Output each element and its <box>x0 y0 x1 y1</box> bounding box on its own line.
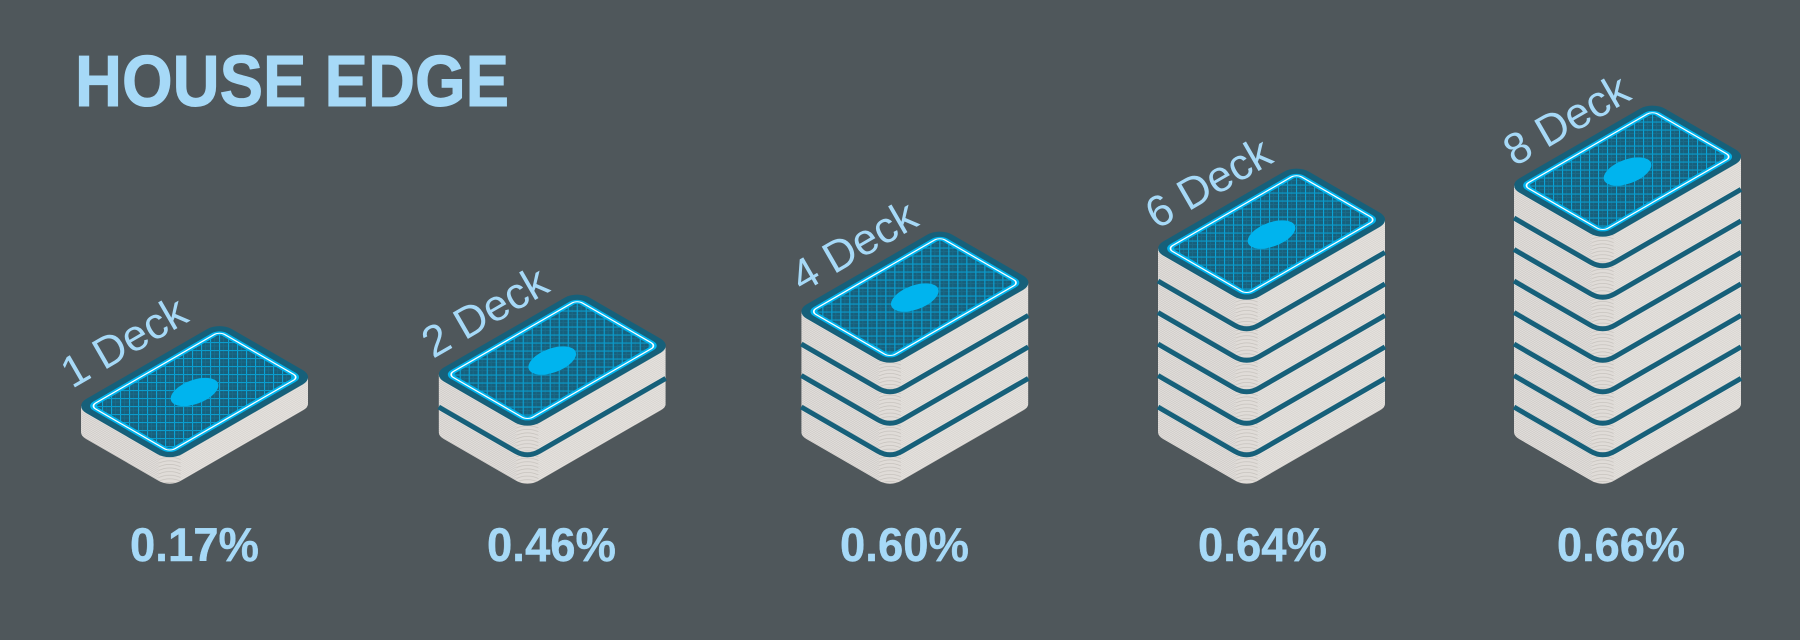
stack: 8 decks <box>1512 106 1742 484</box>
stack: 4 decks <box>800 232 1030 484</box>
stack: 2 decks <box>438 294 667 484</box>
value: 8 deck house edge: 0.66% <box>1557 518 1685 571</box>
top card <box>1507 86 1748 286</box>
side of stack <box>801 284 1028 484</box>
top card <box>432 274 673 474</box>
side of stack <box>1158 220 1385 484</box>
top card <box>1151 148 1392 348</box>
label: 1 Deck: 1 Deck <box>52 286 196 398</box>
side of stack <box>1514 158 1741 484</box>
value: 1 deck house edge: 0.17% <box>130 518 259 571</box>
top card <box>74 306 315 506</box>
deck separators <box>1514 189 1741 455</box>
stack: 1 deck <box>81 326 308 484</box>
label: 6 Deck: 6 Deck <box>1137 127 1281 239</box>
side of stack <box>81 378 308 484</box>
stack: 6 decks <box>1156 168 1386 484</box>
value: 2 deck house edge: 0.46% <box>487 518 616 571</box>
deck separators <box>439 378 666 455</box>
label: 2 Deck: 2 Deck <box>414 256 557 368</box>
label: 4 Deck: 4 Deck <box>782 190 926 302</box>
title: HOUSE EDGE <box>75 42 509 122</box>
value: 6 deck house edge: 0.64% <box>1198 518 1327 571</box>
deck separators <box>1158 252 1385 455</box>
deck separators <box>801 315 1028 455</box>
value: 4 deck house edge: 0.60% <box>840 518 969 571</box>
side of stack <box>438 346 666 484</box>
top card <box>794 212 1035 412</box>
label: 8 Deck: 8 Deck <box>1495 64 1639 176</box>
